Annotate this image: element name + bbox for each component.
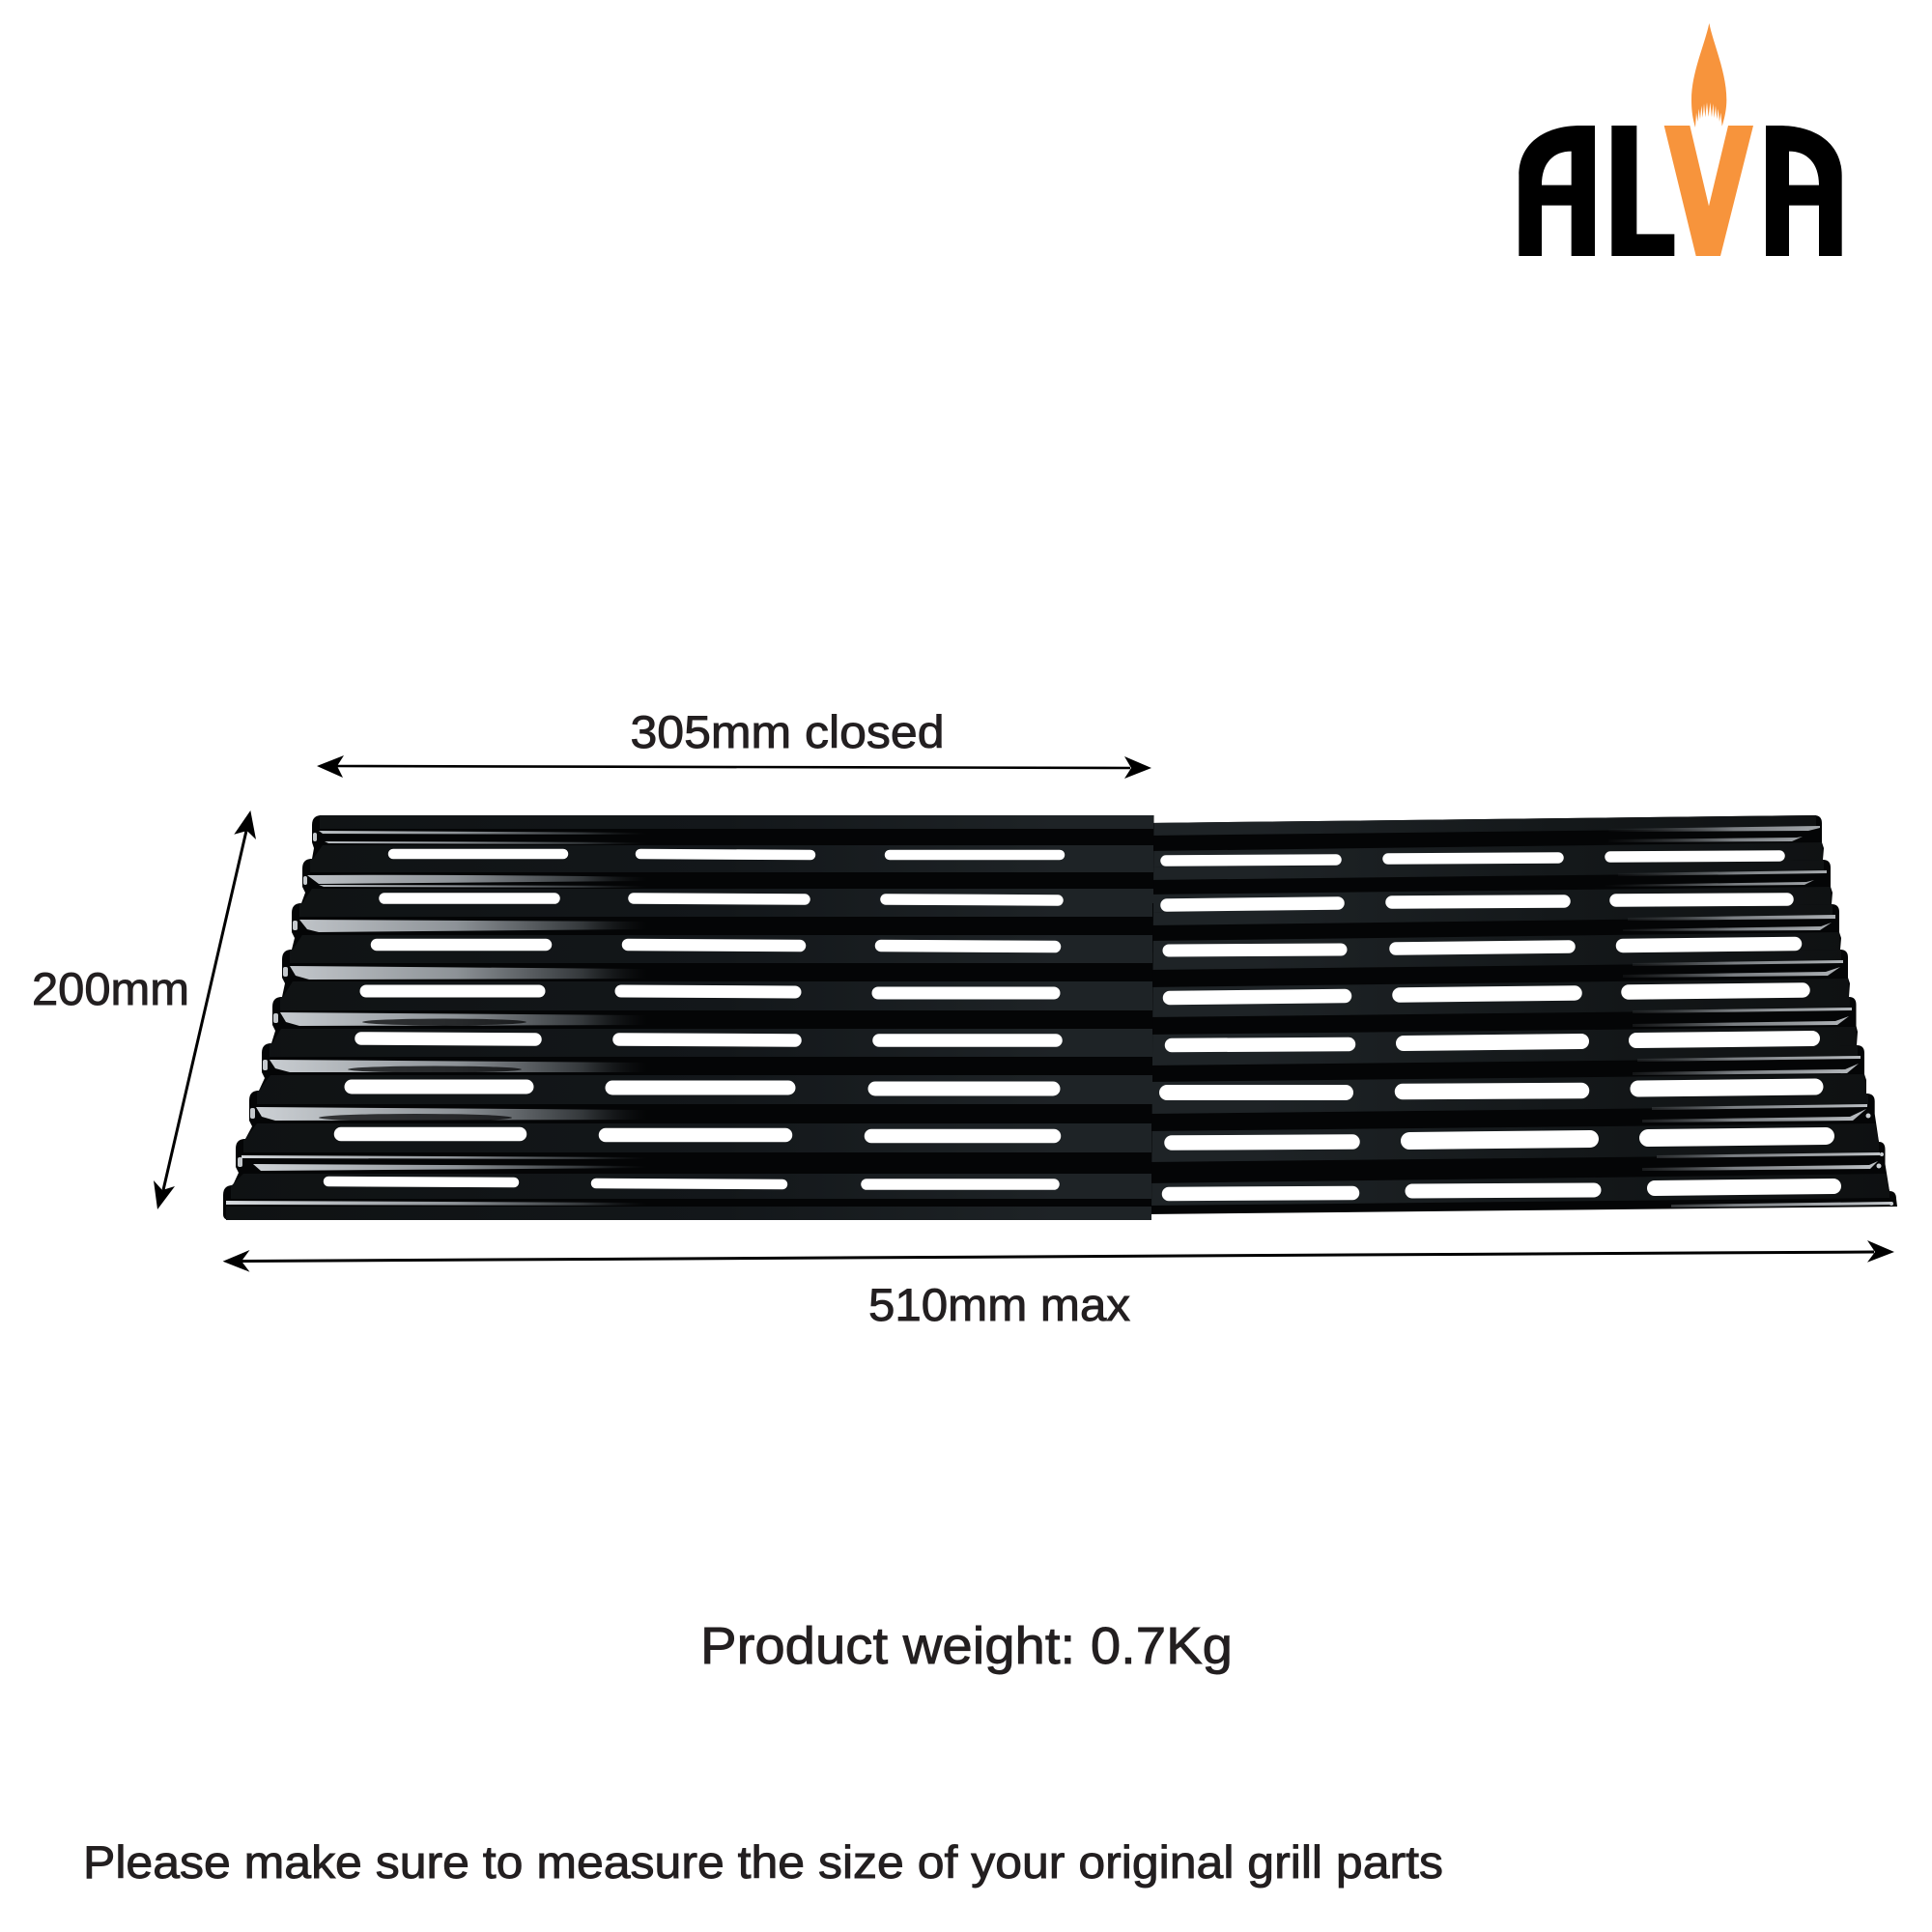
label: 305mm closed: 305mm closed: [630, 706, 945, 757]
right section rail tones: [1148, 815, 1889, 1206]
arrow: 305mm closed: [317, 755, 1151, 779]
left closed section body: [223, 815, 1153, 1220]
dark reflection patches: [319, 1018, 526, 1122]
logo letter V: [1664, 126, 1753, 256]
right section slots: [1166, 856, 1833, 1194]
left section slots: [328, 854, 1060, 1184]
product: grill heat plate: [223, 815, 1897, 1220]
label: 510mm max: 510mm max: [868, 1279, 1130, 1330]
label: 200mm: 200mm: [32, 963, 189, 1014]
product weight text: Product weight: 0.7Kg: [700, 1617, 1233, 1675]
right section glossy highlights: [1604, 826, 1893, 1208]
arrow: 200mm depth: [154, 810, 256, 1209]
logo second letter A: [1766, 126, 1842, 256]
logo flame: [1691, 23, 1726, 128]
left section rail tones: [226, 815, 1153, 1220]
logo letter L: [1611, 126, 1674, 256]
measurement note: Please make sure to measure the size of your original grill parts: [83, 1836, 1443, 1888]
right rail end glints: [1866, 1113, 1893, 1206]
arrow: 510mm max: [223, 1240, 1894, 1272]
logo letter A: [1519, 126, 1595, 256]
right extended section body: [1148, 815, 1897, 1214]
logo: ALVA: [1519, 23, 1842, 256]
left section glossy highlights: [226, 831, 647, 1206]
left rail end glints: [238, 833, 317, 1167]
